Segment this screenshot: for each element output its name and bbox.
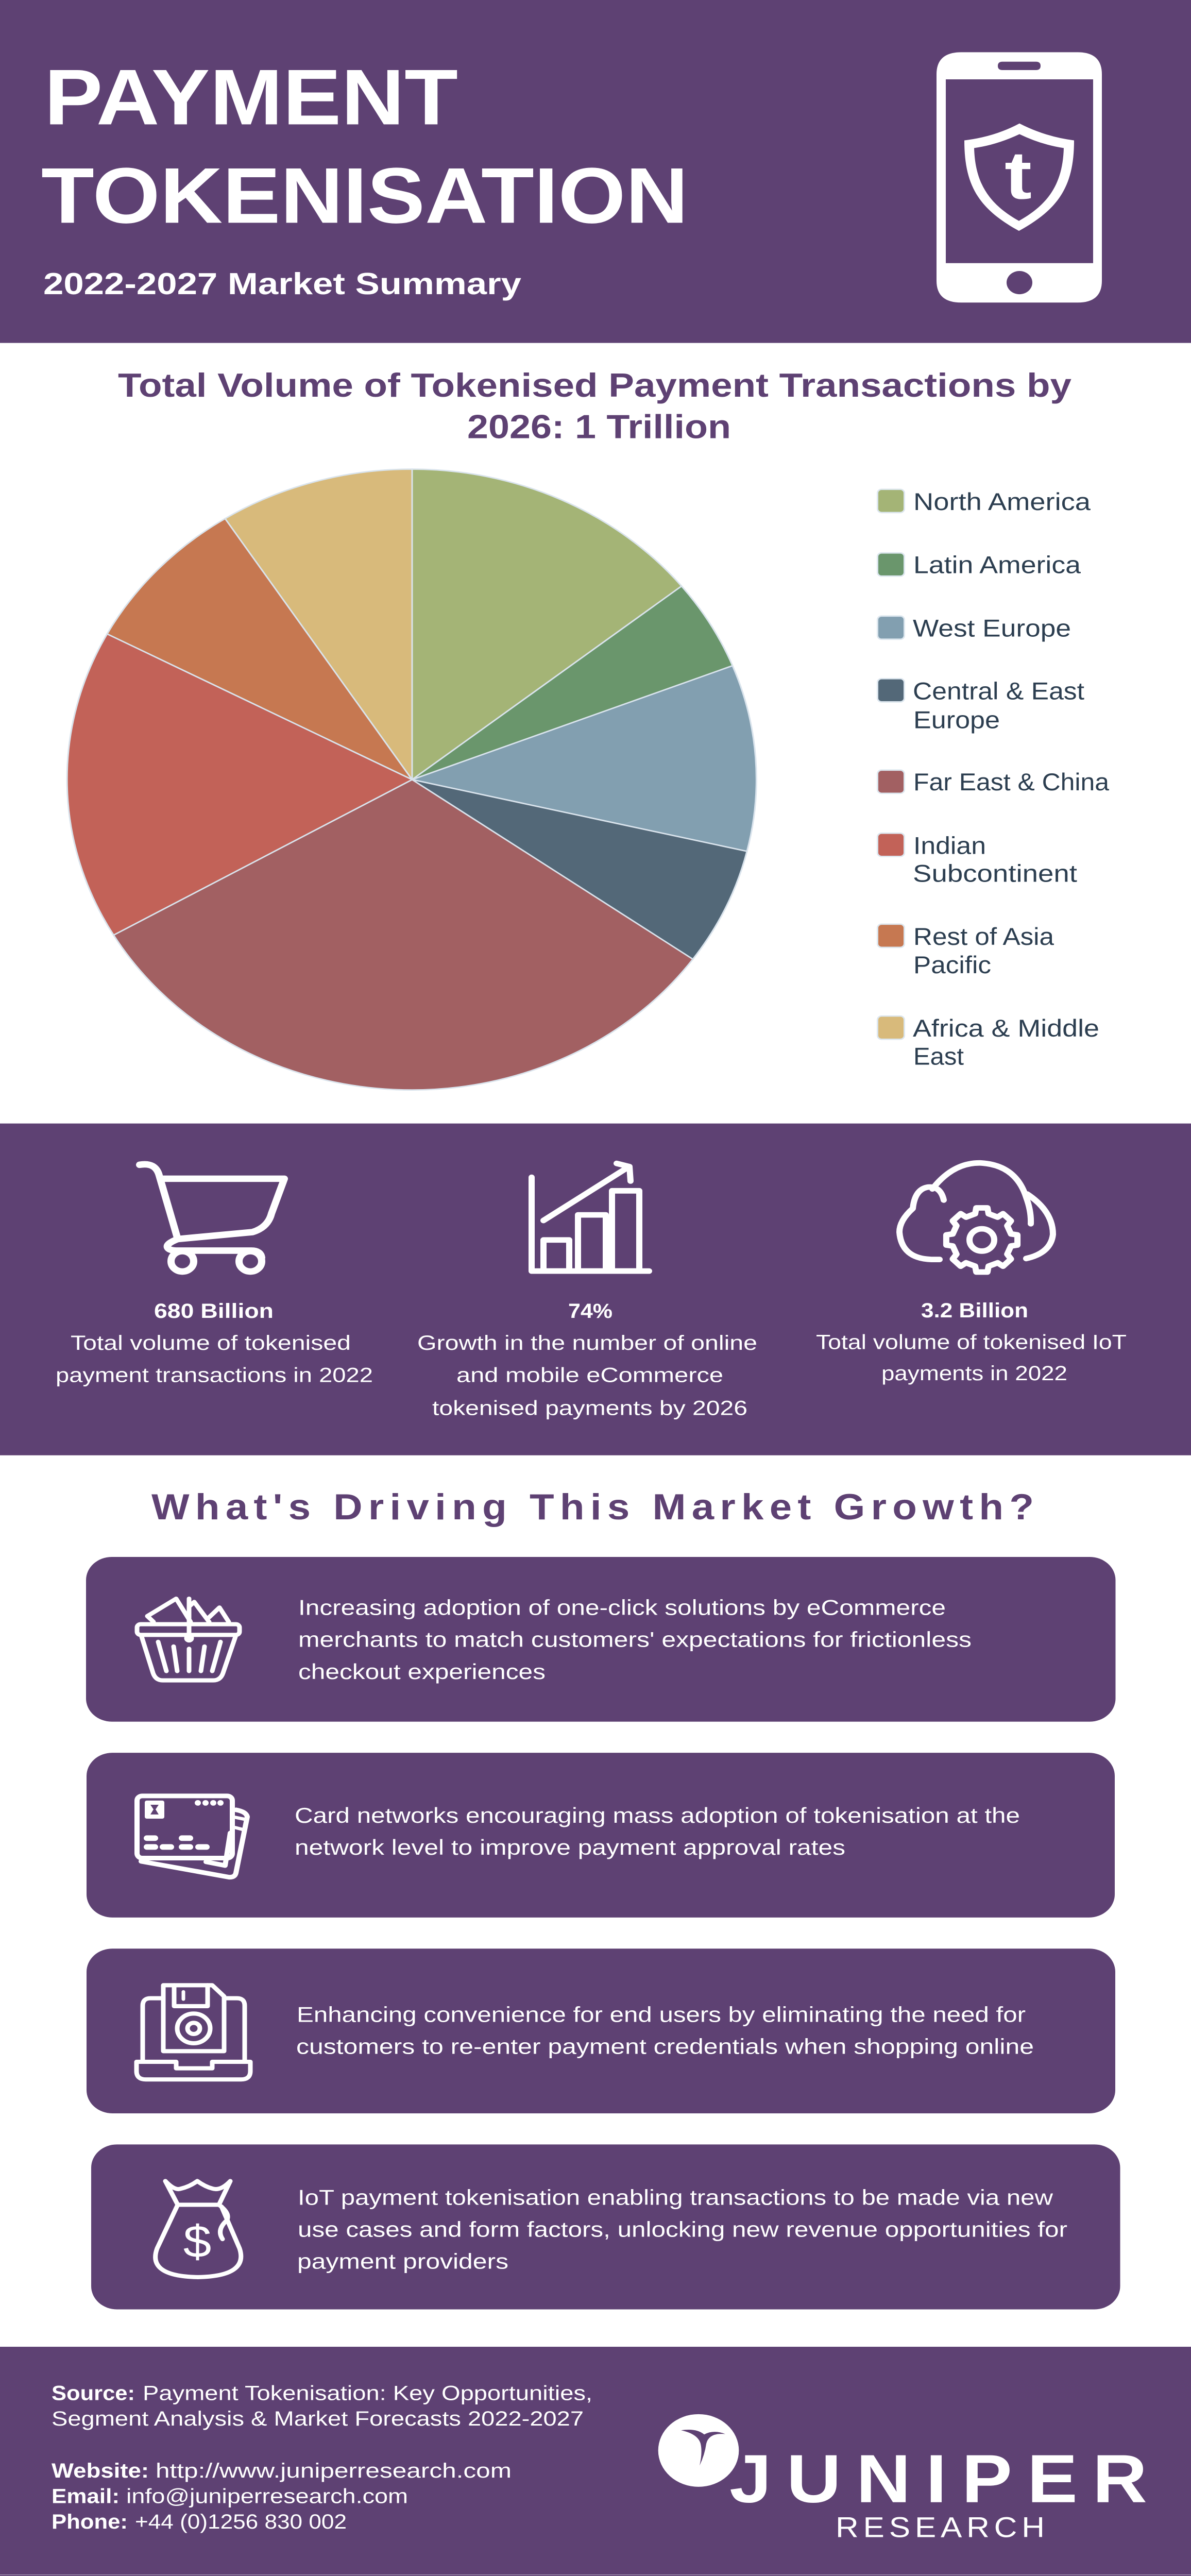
- chart heading: [118, 366, 1071, 445]
- icon: phone with shield: t: [1005, 138, 1032, 213]
- driver text: [298, 1596, 972, 1684]
- slice: Latin America: [412, 586, 733, 779]
- chart heading: 2026: 1 Trillion: [467, 408, 731, 445]
- stat: 3.2 Billion: 3.2 Billion: [921, 1299, 1028, 1322]
- panel: driver 2: [87, 1753, 1115, 1918]
- driver text: Increasing adoption of one-click solutions by eCommerce: [298, 1596, 946, 1620]
- legend: [878, 488, 1109, 1070]
- contact details: +44 (0)1256 830 002: [135, 2510, 347, 2533]
- stat: 74%: Growth in the number of online: [417, 1331, 757, 1354]
- contact details: Phone:: [52, 2510, 128, 2533]
- icon: money bag: [156, 2181, 241, 2277]
- panel: driver 4: [91, 2144, 1120, 2310]
- logo: Juniper Research: [658, 2414, 1147, 2544]
- stat: 3.2 Billion: [816, 1299, 1127, 1384]
- legend item: Far East & China: Far East & China: [913, 769, 1109, 795]
- panel: footer: [0, 2347, 1191, 2576]
- slice: Central & East Europe: [412, 779, 747, 959]
- icon: basket: [137, 1599, 240, 1681]
- legend item: Rest of Asia Pacific: Rest of Asia: [913, 923, 1054, 950]
- legend item: North America: North America: [913, 488, 1091, 515]
- icon: rising bar chart: [532, 1163, 649, 1271]
- legend item: Indian Subcontinent: [878, 833, 1077, 887]
- driver text: [296, 2003, 1034, 2059]
- driver text: IoT payment tokenisation enabling transactions to be made via new: [298, 2185, 1053, 2210]
- legend item: Africa & Middle East: [878, 1015, 1099, 1070]
- panel: header: [0, 0, 1191, 343]
- legend item: Central & East Europe: Europe: [913, 707, 1000, 734]
- icon: phone with shield: [937, 52, 1102, 302]
- panel: key statistics: [0, 1124, 1191, 1455]
- pie chart: [67, 469, 756, 1090]
- legend item: Latin America: Latin America: [913, 552, 1081, 579]
- legend item: Africa & Middle East: East: [913, 1043, 964, 1070]
- stat: 3.2 Billion: Total volume of tokenised IoT: [816, 1330, 1127, 1353]
- contact details: info@juniperresearch.com: [126, 2485, 408, 2507]
- legend item: Indian Subcontinent: Indian: [913, 833, 986, 859]
- icon: cloud with gear: [899, 1163, 1053, 1272]
- title: [41, 54, 688, 240]
- legend item: Central & East Europe: Central & East: [913, 678, 1084, 705]
- title: TOKENISATION: [41, 152, 688, 240]
- stat: 3.2 Billion: payments in 2022: [881, 1362, 1067, 1384]
- driver text: Card networks encouraging mass adoption of tokenisation at the: [295, 1804, 1020, 1828]
- legend item: West Europe: West Europe: [913, 615, 1071, 642]
- driver text: checkout experiences: [298, 1660, 546, 1684]
- stat: 680 Billion: Total volume of tokenised: [71, 1331, 351, 1354]
- stat: 74%: 74%: [568, 1299, 612, 1323]
- driver text: network level to improve payment approval rates: [295, 1836, 845, 1860]
- slice: Far East & China: [113, 779, 693, 1090]
- icon: shopping cart: [140, 1164, 284, 1272]
- driver text: [295, 1804, 1020, 1860]
- legend item: Africa & Middle East: Africa & Middle: [913, 1015, 1099, 1042]
- section heading: What's Driving This Market Growth?: [151, 1487, 1034, 1527]
- logo: Juniper Research: JUNIPER: [729, 2441, 1147, 2517]
- source text: Payment Tokenisation: Key Opportunities,: [143, 2382, 592, 2404]
- subtitle: 2022-2027 Market Summary: [43, 267, 521, 301]
- icon: laptop with disk: [137, 1985, 250, 2079]
- legend item: Central & East Europe: [878, 678, 1084, 734]
- logo: Juniper Research: RESEARCH: [836, 2511, 1045, 2544]
- slice: Indian Subcontinent: [67, 634, 412, 935]
- icon: money bag: $: [183, 2216, 211, 2267]
- stat: 74%: and mobile eCommerce: [456, 1363, 723, 1386]
- title: PAYMENT: [44, 54, 458, 142]
- contact details: Email:: [52, 2485, 120, 2507]
- slice: West Europe: [412, 666, 756, 851]
- stat: 74%: [417, 1299, 757, 1419]
- source text: [52, 2382, 592, 2430]
- driver text: use cases and form factors, unlocking new revenue opportunities for: [298, 2218, 1067, 2242]
- chart heading: Total Volume of Tokenised Payment Transactions by: [118, 366, 1071, 404]
- stat: 74%: tokenised payments by 2026: [432, 1396, 747, 1419]
- driver text: Enhancing convenience for end users by eliminating the need for: [297, 2003, 1026, 2027]
- stat: 680 Billion: 680 Billion: [154, 1299, 274, 1323]
- contact details: [52, 2459, 512, 2533]
- legend item: Rest of Asia Pacific: Pacific: [913, 952, 991, 978]
- icon: payment cards: [137, 1796, 247, 1877]
- driver text: merchants to match customers' expectations for frictionless: [298, 1628, 972, 1652]
- legend item: Indian Subcontinent: Subcontinent: [913, 860, 1077, 887]
- source text: Segment Analysis & Market Forecasts 2022-2027: [52, 2407, 584, 2430]
- stat: 680 Billion: payment transactions in 2022: [56, 1363, 373, 1386]
- source text: Source:: [52, 2382, 135, 2404]
- contact details: Website:: [52, 2459, 149, 2482]
- stat: 680 Billion: [56, 1299, 373, 1386]
- contact details: http://www.juniperresearch.com: [156, 2459, 512, 2482]
- panel: driver 3: [87, 1948, 1115, 2113]
- slice: North America: [412, 469, 682, 779]
- panel: driver 1: [86, 1557, 1116, 1722]
- slice: Africa & Middle East: [225, 469, 412, 779]
- legend item: Rest of Asia Pacific: [878, 923, 1054, 978]
- driver text: [297, 2185, 1067, 2274]
- driver text: payment providers: [297, 2250, 508, 2274]
- slice: Rest of Asia Pacific: [107, 519, 412, 779]
- driver text: customers to re-enter payment credentials when shopping online: [296, 2035, 1034, 2059]
